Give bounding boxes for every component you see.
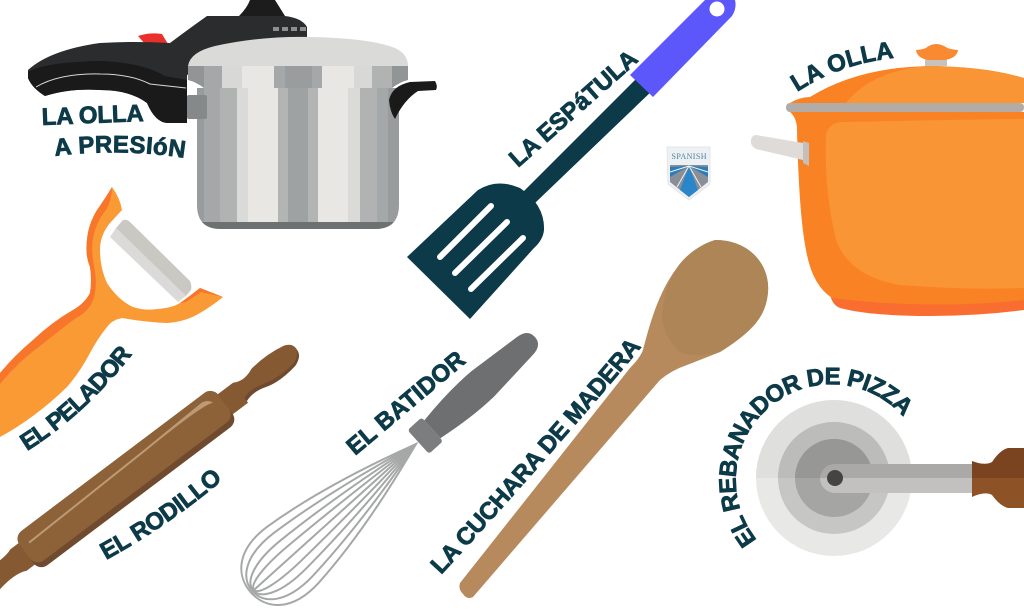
wooden spoon <box>459 240 768 598</box>
logo: spanish academy shield <box>667 147 710 200</box>
cutter pin <box>827 470 843 486</box>
label: el rodillo: EL RODILLO <box>98 470 220 560</box>
cooker long handle <box>28 16 307 123</box>
peeler <box>0 187 223 437</box>
whisk <box>225 308 561 614</box>
label line 1: LA OLLA <box>42 104 144 126</box>
pot rim <box>786 103 1024 112</box>
spatula purple handle <box>630 0 736 97</box>
cutter wheel <box>756 400 912 556</box>
label: el rebanador de pizza: EL REBANADOR DE PIZZA <box>718 367 911 549</box>
shield name: SPANISH <box>672 152 707 161</box>
cooker top knob <box>239 0 285 16</box>
label line 2: A PRESIóN <box>55 136 186 158</box>
pot lid highlight <box>846 66 1024 103</box>
cooker handle shadow <box>28 61 187 123</box>
pot handle <box>751 135 809 166</box>
pot lid <box>790 66 1024 103</box>
spatula shaft <box>523 75 655 203</box>
pot knob <box>916 44 958 66</box>
cooker body <box>197 88 399 229</box>
spoon handle and bowl <box>459 240 768 598</box>
whisk ferrule <box>408 417 443 454</box>
pot bottom shade <box>830 294 1024 316</box>
rolling pin <box>0 333 310 601</box>
spatula head <box>407 183 544 319</box>
label: el pelador: EL PELADOR <box>18 346 132 451</box>
cutter arm <box>820 464 972 493</box>
cutter handle <box>972 448 1024 508</box>
spatula slots <box>440 206 523 289</box>
peeler shade <box>0 187 223 384</box>
pressure cooker <box>28 0 437 229</box>
pin right handle <box>215 339 305 416</box>
shield graphic <box>670 165 708 197</box>
pin left handle <box>0 540 39 594</box>
pin highlight <box>24 397 214 543</box>
pot <box>751 44 1024 316</box>
label: la espátula: LA ESPáTULA <box>508 52 640 168</box>
pin handle shade <box>240 350 305 403</box>
cooker handle highlight <box>36 74 186 88</box>
cooker red valve <box>138 33 168 44</box>
peeler body <box>0 187 223 437</box>
peeler blade <box>110 220 191 302</box>
pizza cutter <box>756 400 1024 556</box>
spatula <box>407 0 736 319</box>
cooker band <box>188 66 408 88</box>
spatula hanging hole <box>710 2 724 16</box>
cooker lid <box>188 37 408 66</box>
label: el batidor: EL BATIDOR <box>345 352 467 456</box>
cooker side handle <box>389 81 437 119</box>
pot panel <box>826 119 1024 289</box>
cooker connector <box>187 95 207 119</box>
cooker handle dots <box>273 27 306 31</box>
pot body <box>790 112 1024 305</box>
pin barrel <box>14 387 238 571</box>
whisk handle <box>421 324 546 442</box>
shield outline <box>667 147 710 200</box>
label: la olla a presión <box>42 104 186 158</box>
spoon bowl <box>662 240 768 355</box>
whisk wires <box>225 415 442 614</box>
label: la cuchara de madera: LA CUCHARA DE MADERA <box>430 340 642 574</box>
label: la olla: LA OLLA <box>789 42 894 92</box>
